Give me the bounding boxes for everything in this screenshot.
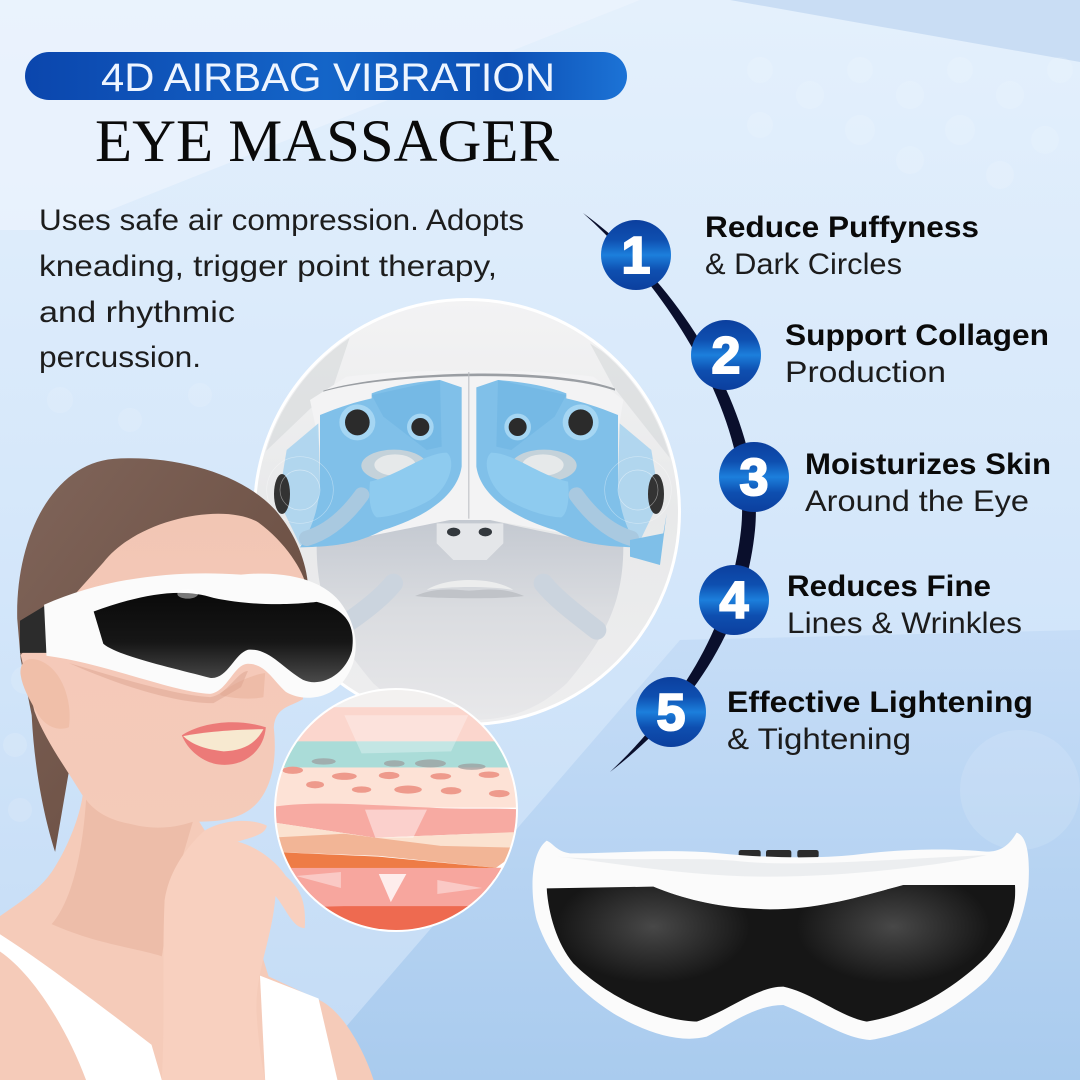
mouth bbox=[182, 722, 266, 765]
item 5: Effective Lightening: & Tightening bbox=[727, 723, 911, 756]
number badge 3: 3 bbox=[740, 449, 768, 507]
lens bbox=[546, 885, 1016, 1022]
item 1: Reduce Puffyness bbox=[601, 211, 979, 290]
item 1: Reduce Puffyness: Reduce Puffyness bbox=[705, 211, 979, 244]
item 5: Effective Lightening bbox=[636, 677, 1033, 756]
description text: and rhythmic bbox=[39, 296, 235, 329]
ear bbox=[20, 659, 70, 729]
description text: kneading, trigger point therapy, bbox=[39, 250, 497, 283]
mask lens bbox=[94, 593, 353, 682]
item 4: Reduces Fine bbox=[699, 565, 1022, 640]
mask shadow bbox=[69, 663, 248, 703]
number badge 4 bbox=[699, 565, 769, 635]
strap bbox=[20, 605, 46, 653]
item 2: Support Collagen: Production bbox=[785, 356, 946, 389]
item 2: Support Collagen: Support Collagen bbox=[785, 319, 1049, 352]
nose bbox=[220, 673, 265, 699]
heading pill: 4D Airbag Vibration: 4D AIRBAG VIBRATION bbox=[101, 56, 555, 100]
woman wearing the eye massager bbox=[0, 458, 374, 1080]
item 4: Reduces Fine: Reduces Fine bbox=[787, 570, 991, 603]
circle illustration: airbag pads on face bbox=[254, 300, 680, 724]
description text: Uses safe air compression. Adopts bbox=[39, 204, 524, 237]
heading pill: 4D Airbag Vibration bbox=[25, 52, 627, 100]
body and neck bbox=[0, 796, 374, 1080]
number badge 3 bbox=[719, 442, 789, 512]
number badge 5 bbox=[636, 677, 706, 747]
title: Eye Massager: EYE MASSAGER bbox=[95, 108, 559, 174]
control buttons bbox=[739, 850, 819, 859]
shell bbox=[533, 833, 1029, 1040]
face bbox=[21, 514, 306, 828]
item 2: Support Collagen bbox=[691, 319, 1049, 390]
mask body bbox=[44, 573, 356, 698]
tank top straps bbox=[0, 934, 337, 1080]
number badge 2: 2 bbox=[712, 327, 740, 385]
hand and arm bbox=[162, 821, 305, 1080]
item 1: Reduce Puffyness: & Dark Circles bbox=[705, 248, 902, 281]
number badge 2 bbox=[691, 320, 761, 390]
hair bbox=[17, 458, 308, 852]
item 4: Reduces Fine: Lines & Wrinkles bbox=[787, 607, 1022, 640]
item 3: Moisturizes Skin: Around the Eye bbox=[805, 485, 1029, 518]
number badge 1: 1 bbox=[622, 227, 650, 285]
item 3: Moisturizes Skin bbox=[719, 442, 1051, 518]
item 3: Moisturizes Skin: Moisturizes Skin bbox=[805, 448, 1051, 481]
curved connector arc bbox=[583, 213, 756, 772]
product: eye massager bbox=[533, 833, 1029, 1040]
circle illustration: skin layers bbox=[269, 683, 523, 936]
number badge 1 bbox=[601, 220, 671, 290]
description text: percussion. bbox=[39, 341, 201, 374]
neck shadow bbox=[52, 800, 193, 956]
number badge 4: 4 bbox=[720, 572, 749, 630]
description text bbox=[39, 204, 524, 374]
item 5: Effective Lightening: Effective Lightening bbox=[727, 686, 1033, 719]
number badge 5: 5 bbox=[657, 684, 685, 742]
